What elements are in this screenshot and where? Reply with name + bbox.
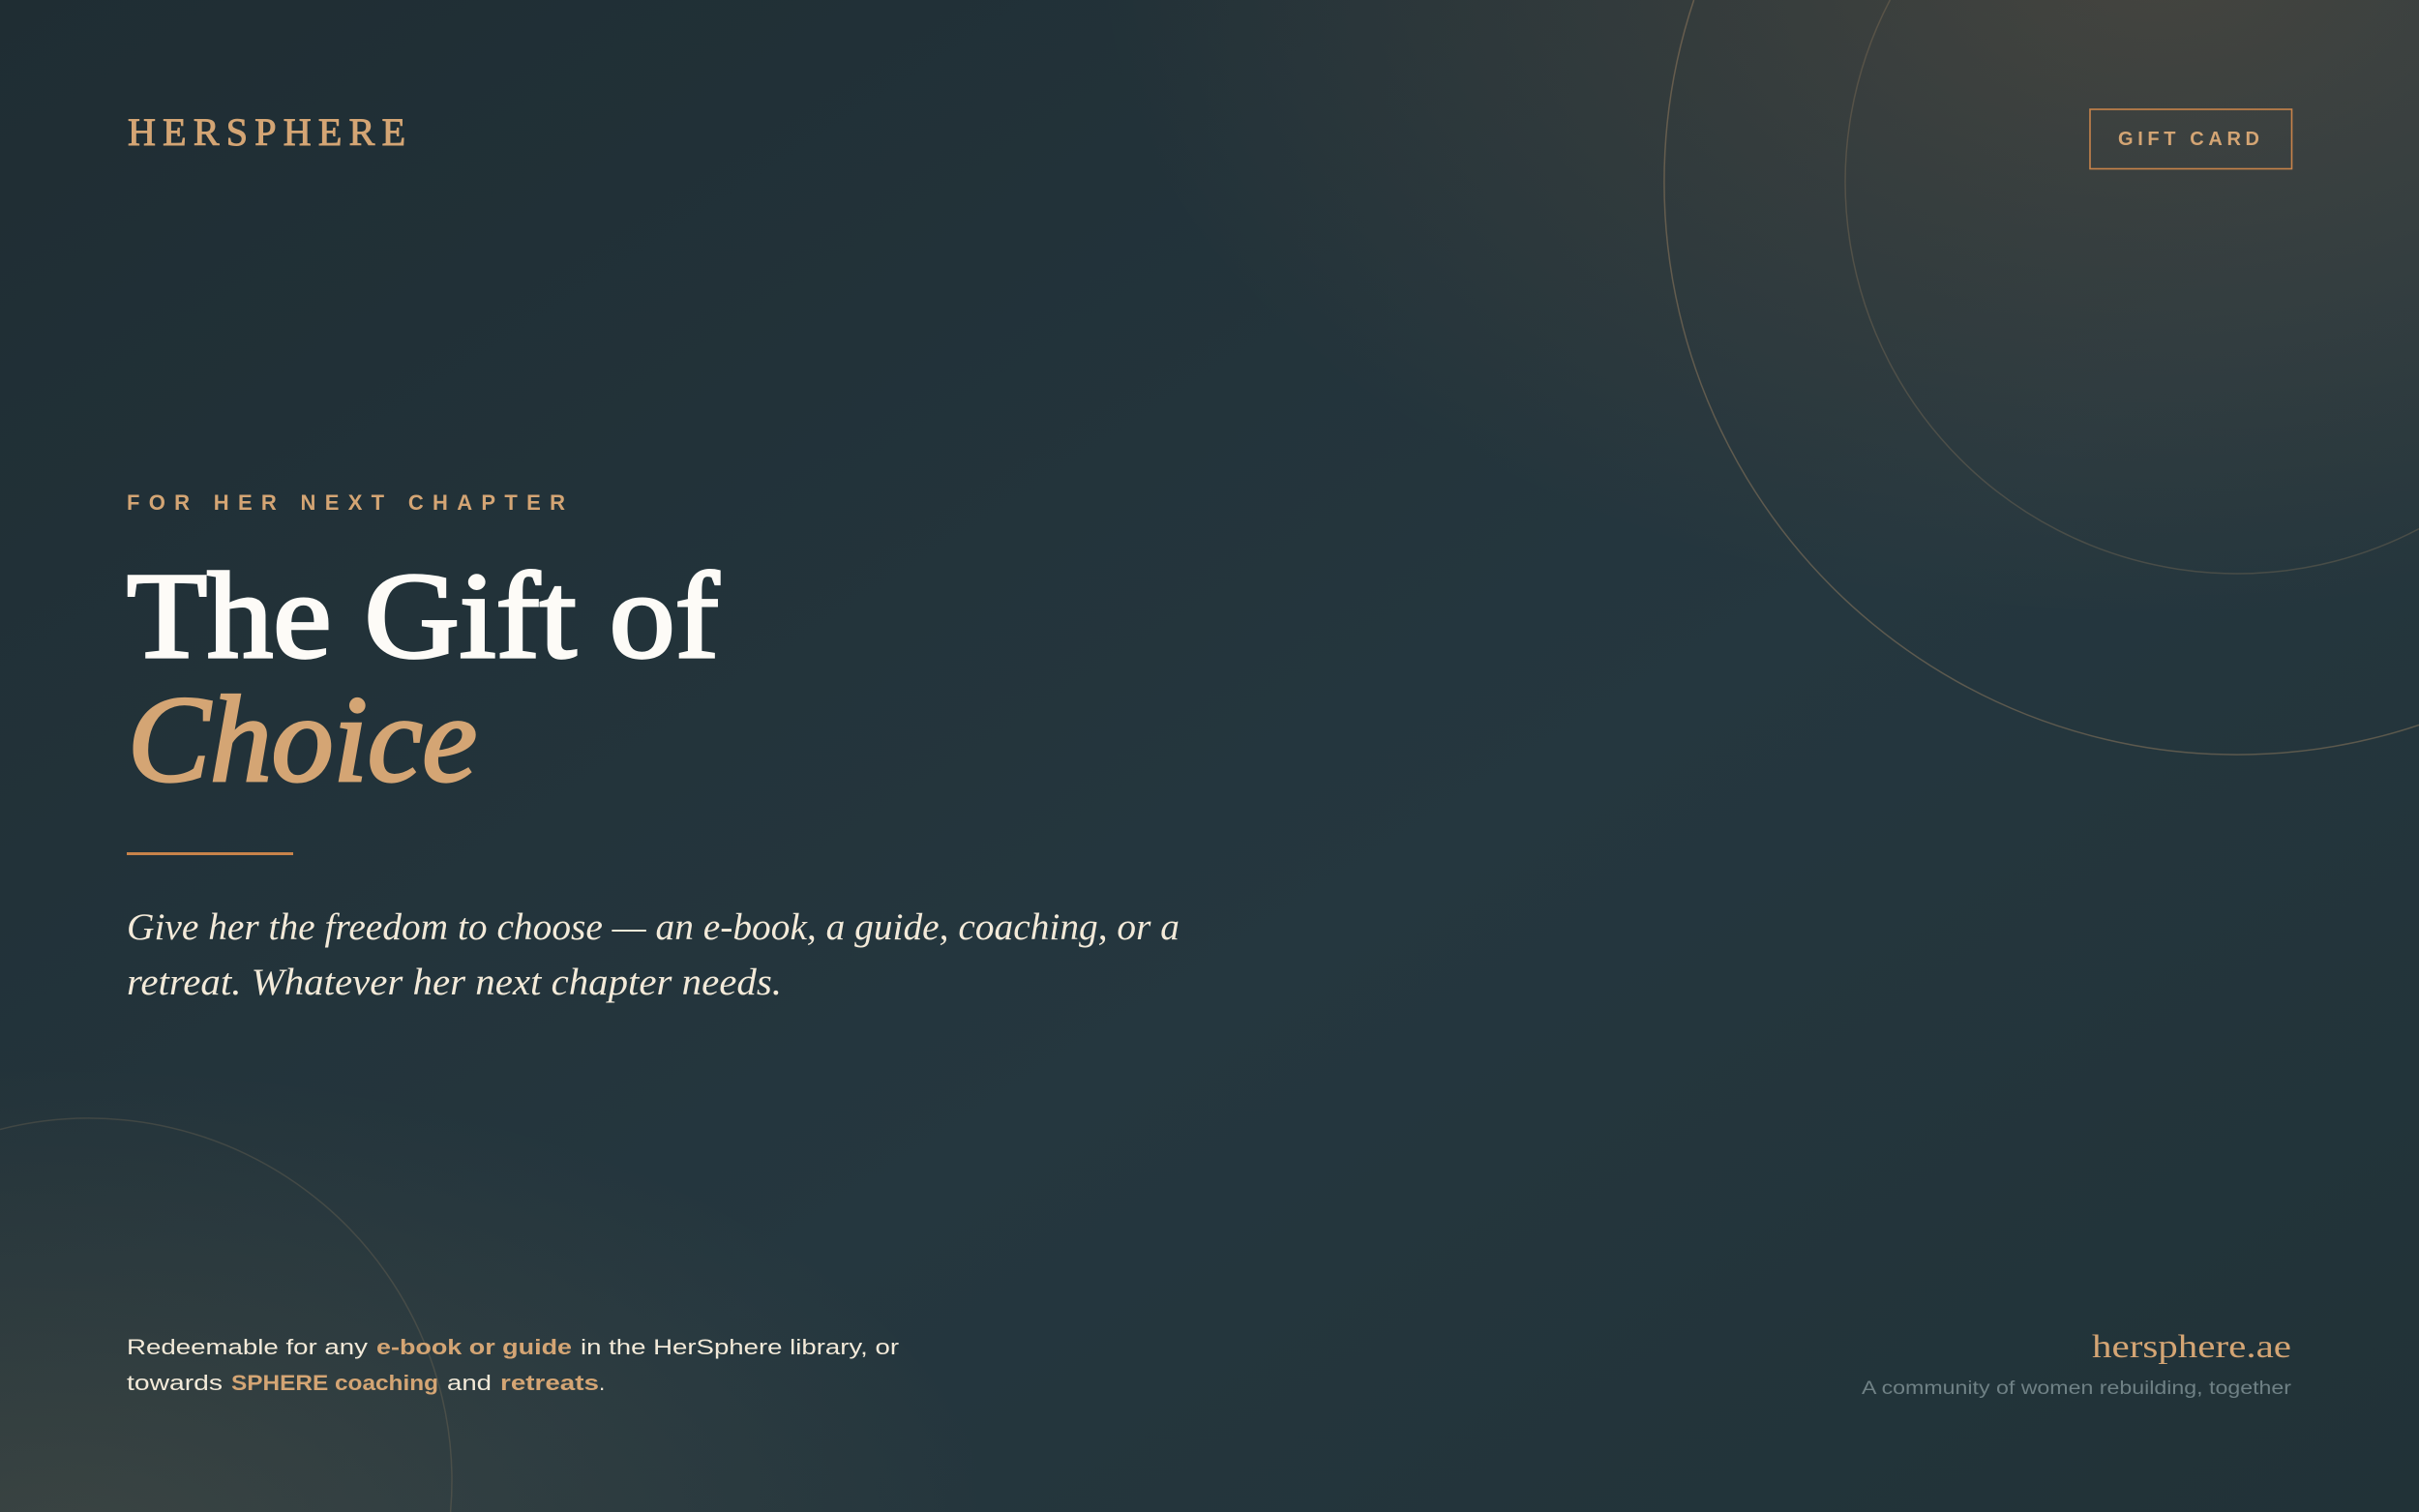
eyebrow: for her next chapter: FOR HER NEXT CHAPTER xyxy=(127,490,565,515)
title: The Gift of Choice xyxy=(127,548,720,808)
website: hersphere.ae xyxy=(2092,1329,2291,1365)
badge: gift card xyxy=(2090,109,2291,168)
redemption note: SPHERE coaching xyxy=(231,1371,438,1395)
logo: HERSPHERE: HERSPHERE xyxy=(128,110,405,154)
subtitle: Give her the freedom to choose — an e-book, a guide, coaching, or a xyxy=(127,906,1180,948)
redemption note: and xyxy=(447,1371,492,1395)
accent rule xyxy=(127,852,293,855)
redemption note: . xyxy=(599,1371,605,1395)
decorative ring: bottom left xyxy=(0,1118,452,1512)
redemption note: in the HerSphere library, or xyxy=(581,1335,900,1359)
redemption note xyxy=(127,1335,900,1395)
badge: gift card: GIFT CARD xyxy=(2118,129,2259,150)
redemption note: retreats xyxy=(500,1371,599,1395)
redemption note: Redeemable for any xyxy=(127,1335,369,1359)
title: The Gift of Choice: The Gift of xyxy=(127,548,720,684)
decorative ring: outer top right xyxy=(1664,0,2419,755)
subtitle: retreat. Whatever her next chapter needs. xyxy=(127,962,782,1003)
title: The Gift of Choice: Choice xyxy=(128,672,477,808)
tagline: A community of women rebuilding, together xyxy=(1862,1378,2292,1399)
subtitle xyxy=(127,906,1180,1003)
redemption note: e-book or guide xyxy=(376,1335,572,1359)
decorative ring: inner top right xyxy=(1845,0,2419,574)
redemption note: towards xyxy=(127,1371,223,1395)
